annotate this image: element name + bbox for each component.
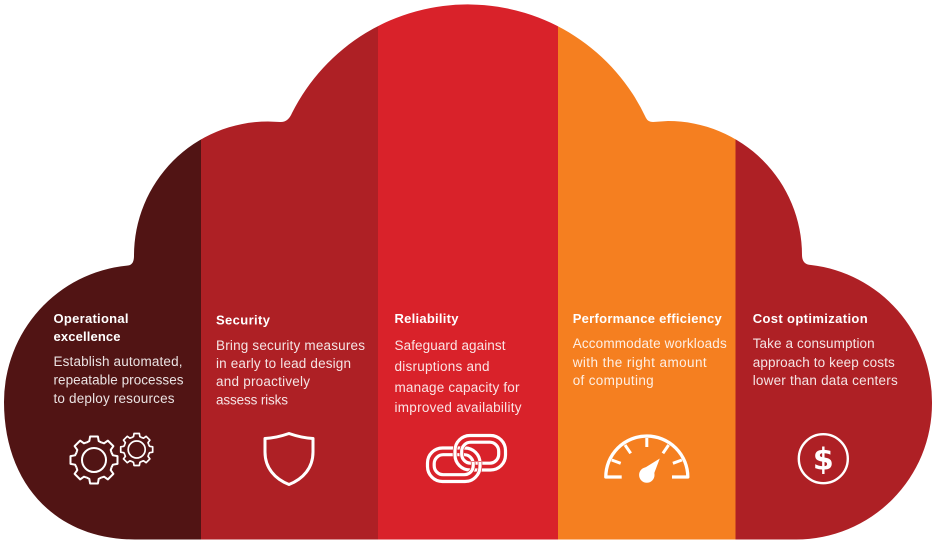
text: cost optimization description: approach to keep costs: [753, 355, 895, 370]
panel: performance efficiency: [558, 0, 736, 544]
text: operational excellence description: Establish automated,: [54, 354, 182, 369]
text: operational excellence description: [54, 354, 184, 406]
text: cost optimization description: lower than data centers: [753, 373, 898, 388]
icon: gears: [70, 434, 153, 484]
text: security description: in early to lead design: [216, 356, 351, 371]
text: security description: and proactively: [216, 374, 310, 389]
band: dark maroon: [4, 139, 202, 540]
text: performance efficiency description: with the right amount: [572, 355, 707, 370]
heading: reliability: Reliability: [394, 311, 459, 326]
text: performance efficiency description: [572, 336, 727, 388]
text: reliability description: Safeguard against: [394, 338, 506, 353]
text: reliability description: improved availability: [394, 400, 522, 415]
band: bright red: [378, 0, 558, 544]
text: cost optimization description: [753, 336, 898, 388]
icon: chain links: [428, 436, 506, 482]
panel: cost optimization: [736, 139, 932, 540]
text: reliability description: disruptions and: [394, 359, 490, 374]
icon: dollar coin: [799, 434, 848, 483]
icon: speedometer gauge: [606, 436, 688, 483]
panel: security: [201, 0, 378, 544]
band: orange: [558, 0, 736, 544]
text: security description: assess risks: [216, 392, 288, 408]
heading: cost optimization: Cost optimization: [753, 311, 868, 326]
heading: operational excellence: [54, 311, 128, 344]
heading: performance efficiency: Performance efficiency: [573, 311, 722, 326]
panel: operational excellence: [4, 139, 202, 540]
band: crimson: [201, 0, 378, 544]
text: security description: Bring security measures: [216, 338, 365, 353]
panel: reliability: [378, 0, 558, 544]
icon: dollar coin: $: [813, 442, 834, 478]
text: reliability description: manage capacity for: [394, 380, 520, 395]
band: crimson: [736, 139, 932, 540]
text: cost optimization description: Take a consumption: [753, 336, 875, 351]
text: performance efficiency description: Accommodate workloads: [573, 336, 727, 351]
heading: security: Security: [216, 312, 271, 328]
text: performance efficiency description: of computing: [573, 373, 654, 388]
text: reliability description: [394, 338, 522, 415]
heading: operational excellence: Operational: [54, 311, 128, 326]
icon: shield: [265, 434, 313, 484]
heading: operational excellence: excellence: [54, 329, 120, 344]
text: security description: [216, 338, 365, 408]
text: operational excellence description: to deploy resources: [54, 391, 175, 406]
text: operational excellence description: repeatable processes: [54, 372, 184, 388]
